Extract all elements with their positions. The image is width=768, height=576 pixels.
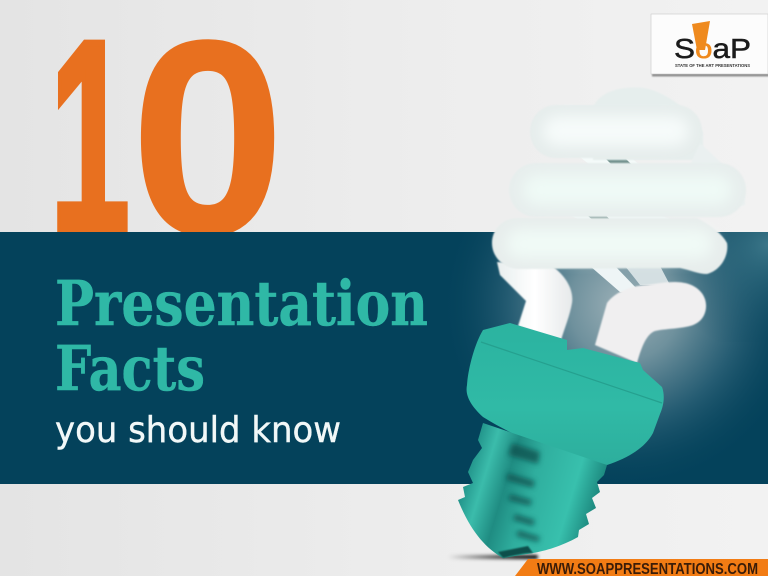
heading: Presentation Facts: Facts	[55, 332, 205, 405]
footer tab	[515, 559, 768, 576]
screw base	[458, 423, 607, 558]
teal-navy band	[0, 232, 768, 484]
screw tip	[498, 546, 533, 558]
icon: light bulb	[448, 87, 746, 559]
right leg tube	[595, 282, 706, 363]
left leg tube	[497, 262, 572, 340]
gap stripes between coils	[555, 153, 680, 292]
cap groove	[481, 342, 662, 403]
middle coil	[509, 163, 746, 217]
cap	[467, 323, 664, 465]
floor shadow	[448, 555, 538, 559]
heading: Presentation Facts	[55, 267, 428, 405]
subheading: you should know	[55, 410, 341, 451]
logo card	[651, 14, 768, 76]
back of middle coil	[690, 143, 745, 215]
big number 10	[50, 0, 284, 292]
heading: Presentation Facts: Presentation	[55, 267, 428, 340]
top coil	[530, 105, 702, 158]
logo exclamation mark	[692, 21, 710, 50]
logo word: SoaP	[674, 33, 751, 64]
logo tagline: STATE OF THE ART PRESENTATIONS	[675, 63, 750, 68]
top bump of coil	[593, 87, 703, 160]
screw dark bands	[506, 443, 540, 542]
bottom coil	[492, 218, 727, 274]
